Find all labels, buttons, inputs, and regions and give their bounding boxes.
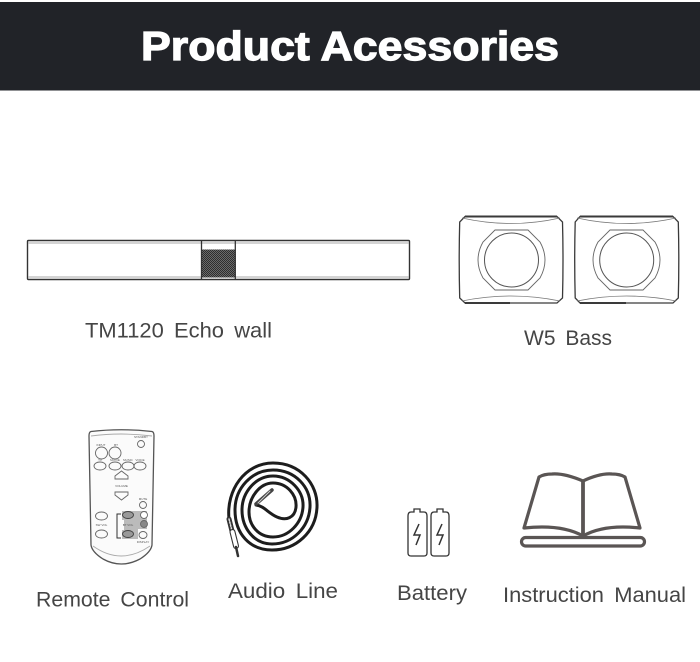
icon: remote control: MUTE xyxy=(139,497,147,501)
icon: coiled audio cable xyxy=(229,463,317,556)
icon: remote control: VOLUME xyxy=(115,484,128,488)
panel: instruction manual xyxy=(503,474,686,607)
label: W5 bass: W5 Bass xyxy=(524,327,612,350)
icon: remote control: TV xyxy=(98,458,102,462)
icon: remote control: MUSIC xyxy=(123,458,134,462)
header banner xyxy=(0,2,700,90)
icon: remote control: DISPLAY xyxy=(137,540,149,544)
label: audio line: Audio Line xyxy=(228,580,338,603)
panel: soundbar xyxy=(28,240,410,342)
title: Product Acessories xyxy=(141,23,559,69)
icon: remote control: BT xyxy=(114,443,118,447)
icon: left bass speaker xyxy=(459,216,563,303)
panel: W5 bass xyxy=(459,216,679,350)
panel: battery xyxy=(397,509,468,605)
icon: remote control: SW VOL xyxy=(96,523,108,527)
label: instruction manual: Instruction Manual xyxy=(503,584,686,607)
icon: remote control xyxy=(89,430,154,564)
icon: batteries xyxy=(408,509,449,556)
label: soundbar: TM1120 Echo wall xyxy=(85,320,272,342)
icon: remote control: BT VOL xyxy=(123,523,134,527)
icon: remote control: MOVIE xyxy=(110,458,120,462)
label: remote control: Remote Control xyxy=(36,588,189,612)
icon: open book xyxy=(522,474,644,546)
icon: soundbar xyxy=(28,240,410,280)
icon: right bass speaker xyxy=(575,216,679,303)
panel: remote control xyxy=(36,430,189,612)
panel: audio line xyxy=(228,463,338,603)
label: battery: Battery xyxy=(397,582,468,605)
icon: remote control: VOICE xyxy=(135,458,145,462)
icon: remote control: INPUT xyxy=(96,443,106,447)
icon: remote control: STANDBY xyxy=(134,435,148,439)
